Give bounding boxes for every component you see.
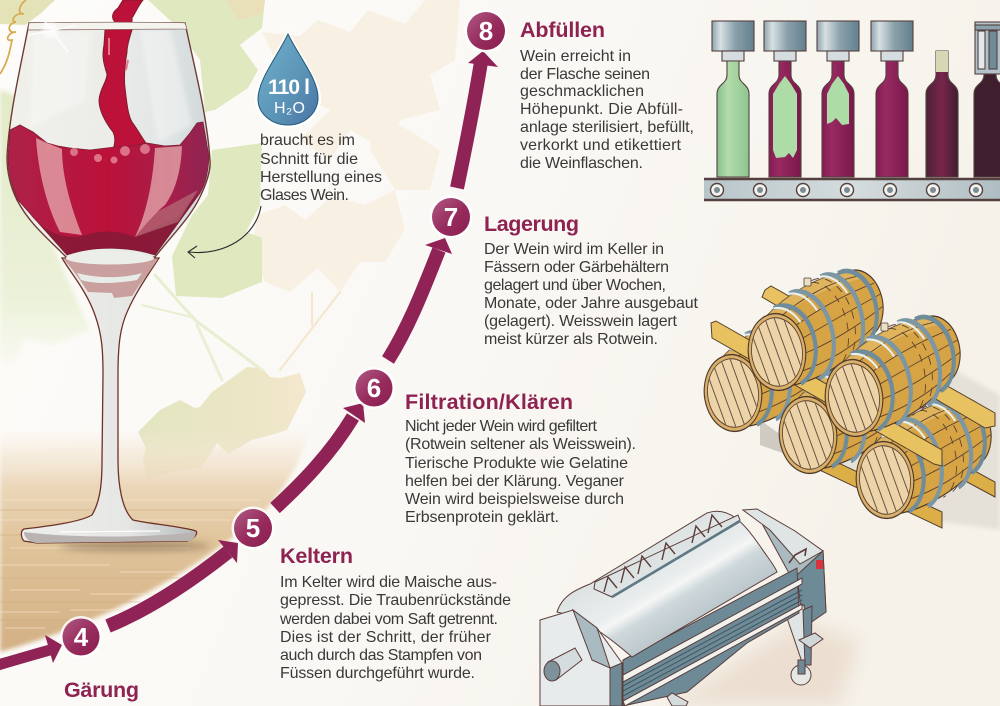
wine press [540,509,860,706]
Filtration text: Nicht jeder Wein wird gefiltert [405,418,598,435]
step 8: 8 [479,16,493,46]
leaves: peach upper [250,0,460,292]
bottle 2 filling [769,61,801,177]
drop formula: H₂O [274,100,305,117]
leaves: green upper [0,0,265,298]
Abfüllen text [520,48,694,172]
vine stems [142,275,340,380]
glass highlight bands [30,30,192,142]
water text [260,132,382,204]
step 8 [464,10,508,52]
water text: Herstellung eines [260,169,382,186]
wine [8,122,209,255]
Abfüllen text: Wein erreicht in [520,48,631,65]
bottom barrel left [692,291,852,450]
bottom outlet [667,693,688,706]
top barrel right [813,296,972,455]
lower beams [790,430,995,528]
Abfüllen text: verkorkt und etikettiert [520,137,682,154]
arrow to 7 [388,238,452,360]
arrow to 8 [457,51,498,188]
wheel [791,665,811,685]
wine pale reflections [36,138,182,237]
Lagerung text: Der Wein wird im Keller in [484,241,664,258]
callout arrow [188,206,261,258]
Lagerung text: meist kürzer als Rotwein. [484,331,658,348]
foot shadow [60,541,210,551]
Abfüllen text: der Flasche seinen [520,66,650,83]
back box [743,510,826,627]
Lagerung text [484,241,699,348]
leg [786,605,811,665]
front box [540,610,622,706]
background vine leaves [0,0,460,481]
foot rim [24,532,196,543]
bottle 1 empty [717,61,749,177]
glass bowl [7,23,210,258]
rollers [710,184,982,196]
conveyor belt [704,179,1000,200]
arrow to 6 [275,403,365,508]
Abfüllen heading: Abfüllen [520,18,605,42]
Gärung heading: Gärung [64,678,139,702]
rim [28,22,187,30]
Lagerung text: Monate, oder Jahre ausgebaut [484,295,699,312]
wine barrels [692,250,1000,537]
Keltern heading: Keltern [280,544,353,568]
step 5 [232,506,274,550]
bottom barrel middle [767,333,926,492]
arrow to 4 [0,635,62,665]
Filtration text: Tierische Produkte wie Gelatine [405,455,628,472]
trough rails [623,578,802,706]
bungs [804,278,888,331]
step 6: 6 [367,373,381,403]
bottle 5 corked [926,51,958,177]
step 4 [60,616,102,658]
handle and button [789,549,806,563]
filling heads [712,21,913,61]
water text: Glases Wein. [260,187,349,204]
arrow to 5 [108,540,238,626]
Keltern text: Füssen durchgeführt wurde. [280,665,475,682]
step 6 [353,367,395,409]
Filtration text: helfen bei der Klärung. Veganer [405,473,625,490]
Filtration text: Erbsenprotein geklärt. [405,509,559,526]
bottle 4 full [876,61,908,177]
water text: Schnitt für die [260,151,358,168]
cylinder [557,511,777,657]
leaves: lower pair [138,367,306,481]
wooden table [0,430,312,652]
Abfüllen text: anlage sterilisiert, befüllt, [520,119,694,136]
upper beams [711,286,995,466]
table grain [0,500,260,628]
Keltern text: Dies ist der Schritt, der früher [280,629,492,646]
Lagerung text: Fässern oder Gärbehältern [484,259,669,276]
Keltern text: auch durch das Stampfen von [280,647,482,664]
press shadow [660,620,860,706]
bottom barrel right [844,378,1000,537]
Keltern text: Im Kelter wird die Maische aus- [280,574,497,591]
Abfüllen text: Höhepunkt. Die Abfüll- [520,101,683,118]
drop amount: 110 l [268,76,310,99]
step 7 [430,196,472,238]
capping head [975,22,1000,74]
wine lower shadow [30,192,200,255]
top barrel left [736,250,896,409]
water text: braucht es im [260,132,355,149]
step 4: 4 [74,622,89,652]
Keltern text [279,574,511,682]
Filtration text: (Rotwein seltener als Weisswein). [405,436,636,453]
Filtration heading: Filtration/Klären [405,390,573,414]
stream [99,0,148,152]
Lagerung heading: Lagerung [484,212,579,236]
Keltern text: gepresst. Die Traubenrückstände [280,592,511,609]
wine glass [7,0,210,551]
process arrows [0,51,498,665]
Filtration text: Wein wird beispielsweise durch [405,491,624,508]
pink reflection [63,259,158,298]
bottle 3 filling [822,61,854,177]
wine bubbles [46,144,150,164]
trough [623,568,799,706]
glass stem [21,258,197,543]
Lagerung text: (gelagert). Weisswein lagert [484,313,678,330]
step 5: 5 [246,513,260,543]
water drop icon [255,30,321,128]
leaves: pale green left [0,90,90,370]
Keltern text: werden dabei vom Saft getrennt. [279,611,498,628]
step 7: 7 [444,202,458,232]
bottle 6 capped [974,61,1000,177]
tendril [0,0,26,74]
hatch strip [594,515,740,597]
barrel shadow [780,370,1000,530]
Abfüllen text: die Weinflaschen. [520,155,643,172]
Lagerung text: gelagert und über Wochen, [484,277,666,294]
bottling line [704,21,1000,200]
front pipe [548,648,582,680]
Abfüllen text: geschmacklichen [520,83,644,100]
Filtration text [405,418,636,526]
glare [28,15,75,52]
